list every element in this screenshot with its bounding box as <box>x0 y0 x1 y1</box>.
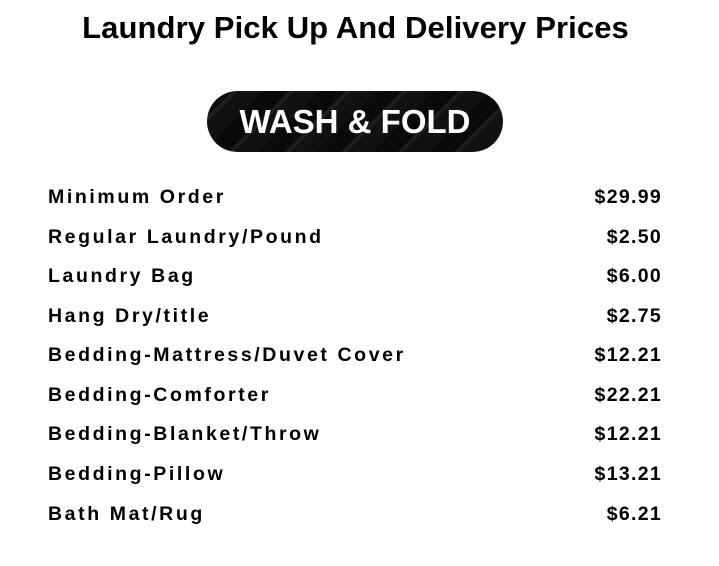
row: minimum order: Minimum Order <box>48 186 226 208</box>
row: hang dry: $2.75 <box>607 305 662 327</box>
row: hang dry <box>48 305 662 327</box>
row: bath mat: Bath Mat/Rug <box>48 503 205 525</box>
row: blanket: $12.21 <box>595 423 662 445</box>
row: mattress: $12.21 <box>595 344 662 366</box>
heading pill: wash & fold: WASH & FOLD <box>240 103 470 140</box>
row: regular laundry: Regular Laundry/Pound <box>48 226 324 248</box>
row: comforter <box>48 384 662 406</box>
row: laundry bag <box>48 265 662 287</box>
row: comforter: $22.21 <box>595 384 662 406</box>
row: blanket: Bedding-Blanket/Throw <box>48 423 321 445</box>
row: bath mat: $6.21 <box>607 503 662 525</box>
row: hang dry: Hang Dry/title <box>48 305 211 327</box>
row: minimum order <box>48 186 662 208</box>
row: laundry bag: Laundry Bag <box>48 265 196 287</box>
row: minimum order: $29.99 <box>595 186 662 208</box>
row: mattress: Bedding-Mattress/Duvet Cover <box>48 344 406 366</box>
row: laundry bag: $6.00 <box>607 265 662 287</box>
row: mattress <box>48 344 662 366</box>
row: pillow: Bedding-Pillow <box>48 463 225 485</box>
row: pillow: $13.21 <box>595 463 662 485</box>
row: comforter: Bedding-Comforter <box>48 384 271 406</box>
row: bath mat <box>48 503 662 525</box>
title: Laundry Pick Up And Delivery Prices <box>82 10 629 45</box>
heading pill: wash & fold <box>207 91 503 152</box>
row: regular laundry: $2.50 <box>607 226 662 248</box>
row: pillow <box>48 463 662 485</box>
row: regular laundry <box>48 226 662 248</box>
row: blanket <box>48 423 662 445</box>
